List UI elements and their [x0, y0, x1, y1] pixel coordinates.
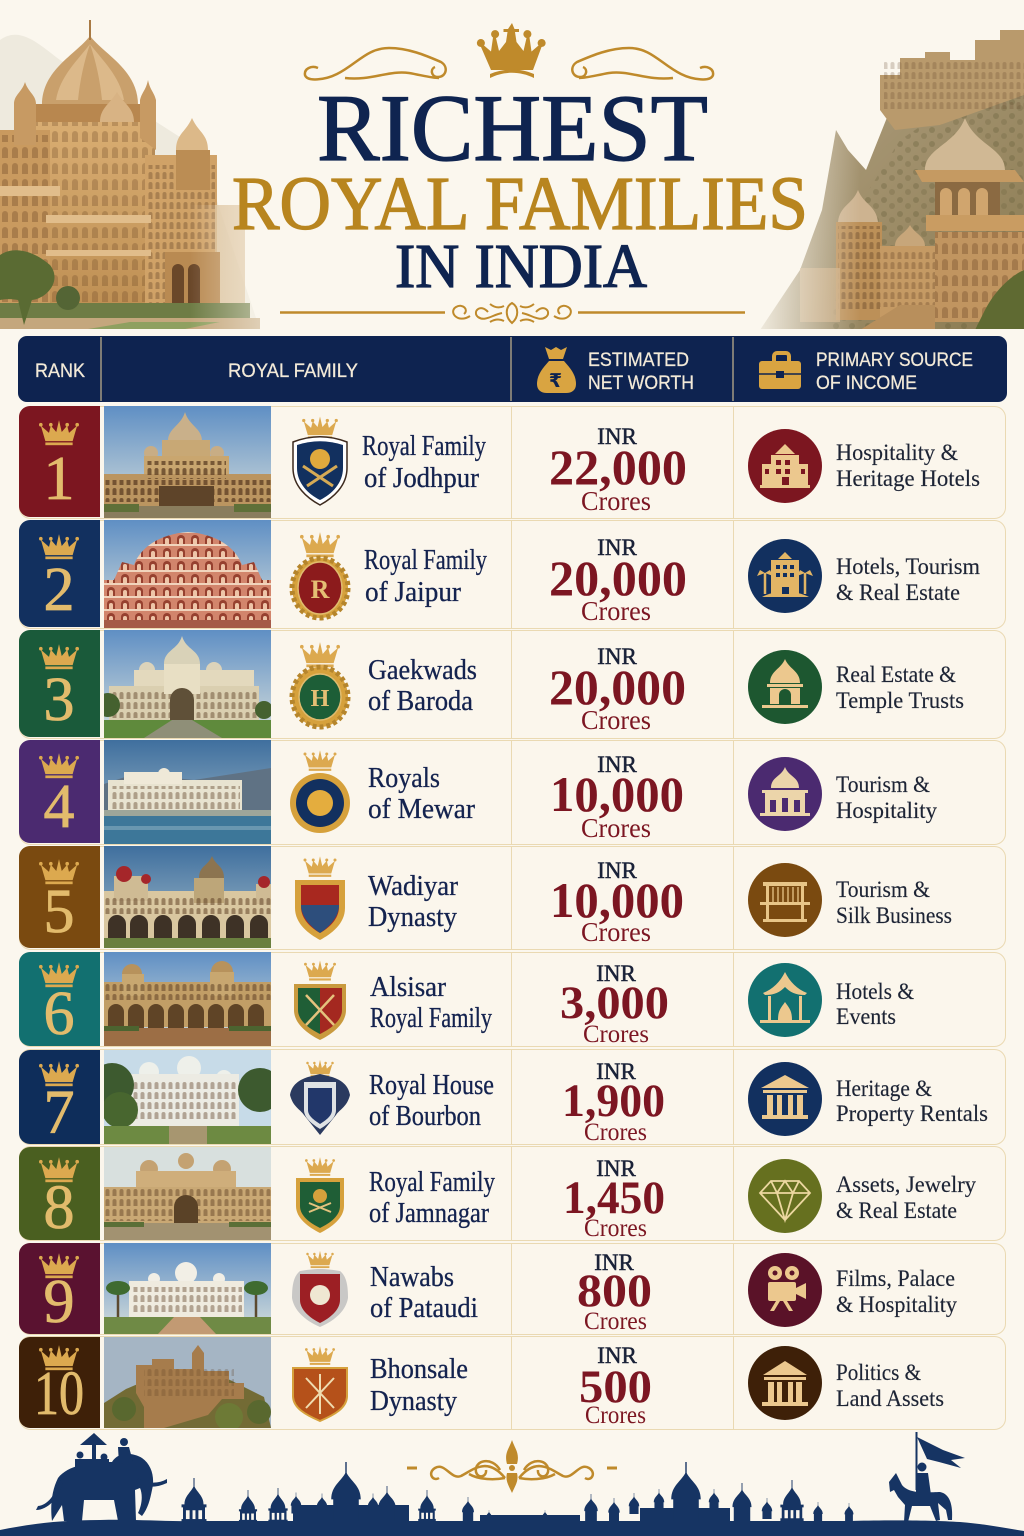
- family name: Royal Family: [364, 545, 487, 576]
- family name: Dynasty: [370, 1386, 457, 1417]
- photo: Jamnagar palace: [104, 1147, 271, 1240]
- rank badge 5: 5: [44, 878, 74, 946]
- family name: of Jamnagar: [369, 1198, 490, 1229]
- income source: [836, 1172, 976, 1223]
- row 5: Wadiyar: [19, 846, 1006, 950]
- income source: Tourism &: [836, 772, 930, 797]
- net worth: [550, 752, 684, 843]
- rank badge 10: [19, 1337, 100, 1428]
- column heading: royal family: ROYAL FAMILY: [228, 361, 358, 382]
- net worth: INR: [597, 752, 637, 777]
- rank badge 9: [19, 1243, 100, 1336]
- net worth: INR: [597, 644, 637, 669]
- net worth: 22,000: [549, 439, 687, 495]
- net worth: 3,000: [560, 977, 669, 1029]
- family name: [370, 972, 492, 1034]
- family name: of Mewar: [368, 794, 476, 825]
- icon: film camera: [748, 1253, 822, 1327]
- row 10: Bhonsale: [19, 1336, 1006, 1431]
- flourish left: [305, 48, 446, 79]
- family name: of Bourbon: [369, 1101, 481, 1132]
- photo: Pataudi Palace: [104, 1243, 271, 1334]
- net worth: [549, 535, 687, 626]
- photo: Alsisar Mahal: [104, 952, 271, 1046]
- top ornament: crown with flourishes: [305, 23, 713, 79]
- photo: Laxmi Vilas Palace: [104, 630, 271, 738]
- net worth: INR: [596, 961, 636, 986]
- income source: & Real Estate: [836, 1198, 957, 1223]
- net worth: INR: [597, 424, 637, 449]
- row 1: Jodhpur: [19, 406, 1006, 518]
- row 7: Bourbon: [19, 1050, 1006, 1147]
- income source: Assets, Jewelry: [836, 1172, 976, 1197]
- net worth: [560, 961, 669, 1048]
- net worth: INR: [597, 1343, 637, 1368]
- rank badge 1: [19, 406, 100, 517]
- net worth: Crores: [583, 1021, 649, 1048]
- family name: [369, 1070, 494, 1132]
- family name: [370, 1354, 468, 1417]
- rank badge 1: 1: [44, 445, 74, 513]
- row 3: Baroda: [19, 630, 1006, 738]
- rank badge 3: [19, 630, 100, 737]
- row 9: Pataudi: [19, 1243, 1006, 1336]
- crest: silver and red: [292, 1251, 348, 1327]
- income source: Real Estate &: [836, 662, 956, 687]
- family name: of Jaipur: [365, 577, 462, 608]
- income source: Heritage Hotels: [836, 466, 980, 491]
- title: [232, 75, 808, 301]
- photo: Lake Palace Udaipur: [104, 740, 271, 844]
- header illustration: palace on the left: [0, 0, 330, 335]
- footer silhouette: elephant with riders: [36, 1433, 167, 1521]
- income source: Heritage &: [836, 1076, 932, 1101]
- photo: Hawa Mahal: [104, 520, 271, 628]
- family name: Nawabs: [370, 1262, 454, 1293]
- crest: red oval: [292, 532, 348, 618]
- family name: Royal Family: [369, 1167, 495, 1198]
- crest: orange shield: [293, 1346, 347, 1421]
- rank badge 3: 3: [44, 666, 74, 734]
- family name: [368, 871, 459, 933]
- crest: green oval: H: [311, 686, 330, 712]
- column heading: net worth: [588, 350, 694, 394]
- family name: Royals: [368, 763, 440, 794]
- crest: navy shield: [293, 416, 347, 505]
- footer silhouette: horseman with flag: [889, 1432, 965, 1522]
- crest: green oval: [292, 642, 348, 727]
- icon: crown: [477, 23, 546, 78]
- crest: sun roundel: [290, 750, 350, 833]
- header illustration: fort and pavilions on the right: [745, 0, 1024, 340]
- column heading: net worth: ESTIMATED: [588, 350, 689, 371]
- net worth: 800: [577, 1265, 652, 1317]
- photo: Bourbon residence: [104, 1050, 271, 1144]
- rank badge 6: 6: [44, 980, 74, 1048]
- family name: of Baroda: [368, 686, 474, 717]
- income source: [836, 662, 964, 713]
- income source: Hospitality &: [836, 440, 958, 465]
- net worth: [549, 644, 686, 735]
- family name: Royal Family: [370, 1003, 492, 1034]
- rank badge 4: 4: [44, 773, 74, 841]
- rank badge 4: [19, 740, 100, 843]
- net worth: [579, 1343, 652, 1429]
- income source: [836, 440, 980, 491]
- photo: Umaid Bhawan Palace: [104, 406, 271, 518]
- crest: silver ornamental: [290, 1060, 350, 1135]
- net worth: INR: [594, 1250, 634, 1275]
- footer ornament: [407, 1440, 617, 1493]
- net worth: [549, 424, 687, 516]
- icon: palace dome: [748, 757, 822, 831]
- flourish right: [572, 48, 713, 79]
- column heading: income source: OF INCOME: [816, 373, 917, 394]
- family name: Bhonsale: [370, 1354, 468, 1385]
- icon: government building: [748, 1346, 822, 1420]
- column heading: net worth: NET WORTH: [588, 373, 694, 394]
- net worth: [550, 858, 684, 947]
- family name: Dynasty: [368, 902, 457, 933]
- income source: [836, 979, 914, 1029]
- title: RICHEST: [317, 75, 708, 181]
- family name: [369, 1167, 495, 1229]
- icon: hotel building: [748, 429, 822, 503]
- income source: & Hospitality: [836, 1292, 957, 1317]
- strip under header illustration: [0, 329, 1024, 333]
- crest: green shield: [296, 1157, 344, 1233]
- row 2: Jaipur: [19, 520, 1006, 628]
- icon: hotel with palms: [748, 539, 822, 613]
- rank badge 8: [19, 1147, 100, 1242]
- income source: Temple Trusts: [836, 688, 964, 713]
- net worth: Crores: [585, 1402, 646, 1429]
- row 4: Mewar: [19, 740, 1006, 844]
- net worth: 20,000: [549, 550, 687, 606]
- income source: Tourism &: [836, 877, 930, 902]
- title: IN INDIA: [395, 233, 647, 301]
- column heading: income source: PRIMARY SOURCE: [816, 350, 973, 371]
- rank badge 8: 8: [44, 1174, 74, 1242]
- income source: Events: [836, 1004, 896, 1029]
- table header bar: [18, 336, 1007, 402]
- family name: of Jodhpur: [364, 463, 480, 494]
- photo: Mysore Palace: [104, 846, 271, 948]
- title divider ornament: [280, 303, 745, 323]
- rank badge 7: [19, 1050, 100, 1147]
- net worth: INR: [596, 1059, 636, 1084]
- row 8: Jamnagar: [19, 1146, 1006, 1242]
- net worth: Crores: [581, 486, 651, 516]
- income source: Hotels &: [836, 979, 914, 1004]
- icon: temple: [748, 650, 822, 724]
- icon: diamond: [748, 1159, 822, 1233]
- income source: Silk Business: [836, 903, 952, 928]
- icon: silk loom: [748, 863, 822, 937]
- crest: red shield: [295, 856, 345, 940]
- family name: [364, 545, 487, 608]
- icon: money bag: [537, 347, 576, 393]
- net worth: 10,000: [550, 872, 684, 928]
- footer silhouette: skyline: [0, 1462, 1024, 1536]
- net worth: Crores: [581, 917, 651, 947]
- icon: briefcase: [759, 351, 801, 389]
- income source: Hotels, Tourism: [836, 554, 980, 579]
- column heading: rank: RANK: [35, 361, 85, 382]
- net worth: 1,900: [562, 1075, 665, 1127]
- income source: [836, 1360, 944, 1411]
- net worth: 10,000: [550, 766, 684, 822]
- rank badge 9: 9: [44, 1268, 74, 1336]
- rank badge 5: [19, 846, 100, 948]
- family name: Royal House: [369, 1070, 494, 1101]
- income source: & Real Estate: [836, 580, 960, 605]
- family name: of Pataudi: [370, 1293, 478, 1324]
- income source: [836, 1076, 988, 1126]
- column heading: income source: [816, 350, 973, 394]
- family name: [368, 655, 477, 717]
- icon: money bag: ₹: [549, 370, 562, 392]
- crest: red oval: R: [311, 575, 330, 604]
- income source: [836, 1266, 957, 1317]
- crest: green and red shield: [294, 961, 346, 1040]
- photo: hill fort: [104, 1337, 271, 1428]
- net worth: Crores: [581, 705, 651, 735]
- rank badge 2: [19, 520, 100, 627]
- title: ROYAL FAMILIES: [232, 162, 808, 246]
- net worth: INR: [596, 1156, 636, 1181]
- icon: classical columns: [748, 1062, 822, 1136]
- net worth: [563, 1156, 665, 1242]
- family name: [368, 763, 476, 825]
- family name: Wadiyar: [368, 871, 459, 902]
- net worth: 20,000: [549, 659, 686, 715]
- income source: Property Rentals: [836, 1101, 988, 1126]
- rank badge 7: 7: [44, 1079, 74, 1147]
- rank badge 6: [19, 952, 100, 1048]
- net worth: Crores: [584, 1215, 647, 1242]
- row 6: Alsisar: [19, 952, 1006, 1048]
- income source: Hospitality: [836, 798, 937, 823]
- net worth: INR: [597, 858, 637, 883]
- net worth: Crores: [584, 1119, 647, 1146]
- income source: Films, Palace: [836, 1266, 955, 1291]
- net worth: [562, 1059, 665, 1146]
- family name: Gaekwads: [368, 655, 477, 686]
- net worth: Crores: [584, 1308, 647, 1335]
- net worth: INR: [597, 535, 637, 560]
- income source: [836, 772, 937, 823]
- net worth: [577, 1250, 652, 1335]
- icon: event pavilion: [748, 963, 822, 1037]
- family name: Alsisar: [370, 972, 447, 1003]
- net worth: 1,450: [563, 1172, 665, 1224]
- family name: [362, 431, 486, 494]
- family name: Royal Family: [362, 431, 486, 462]
- income source: [836, 877, 952, 928]
- net worth: Crores: [581, 596, 651, 626]
- income source: Politics &: [836, 1360, 921, 1385]
- rank badge 2: 2: [44, 556, 74, 624]
- net worth: 500: [579, 1361, 652, 1413]
- income source: Land Assets: [836, 1386, 944, 1411]
- net worth: Crores: [581, 813, 651, 843]
- rank badge 10: 10: [34, 1360, 84, 1428]
- income source: [836, 554, 980, 605]
- family name: [370, 1262, 478, 1324]
